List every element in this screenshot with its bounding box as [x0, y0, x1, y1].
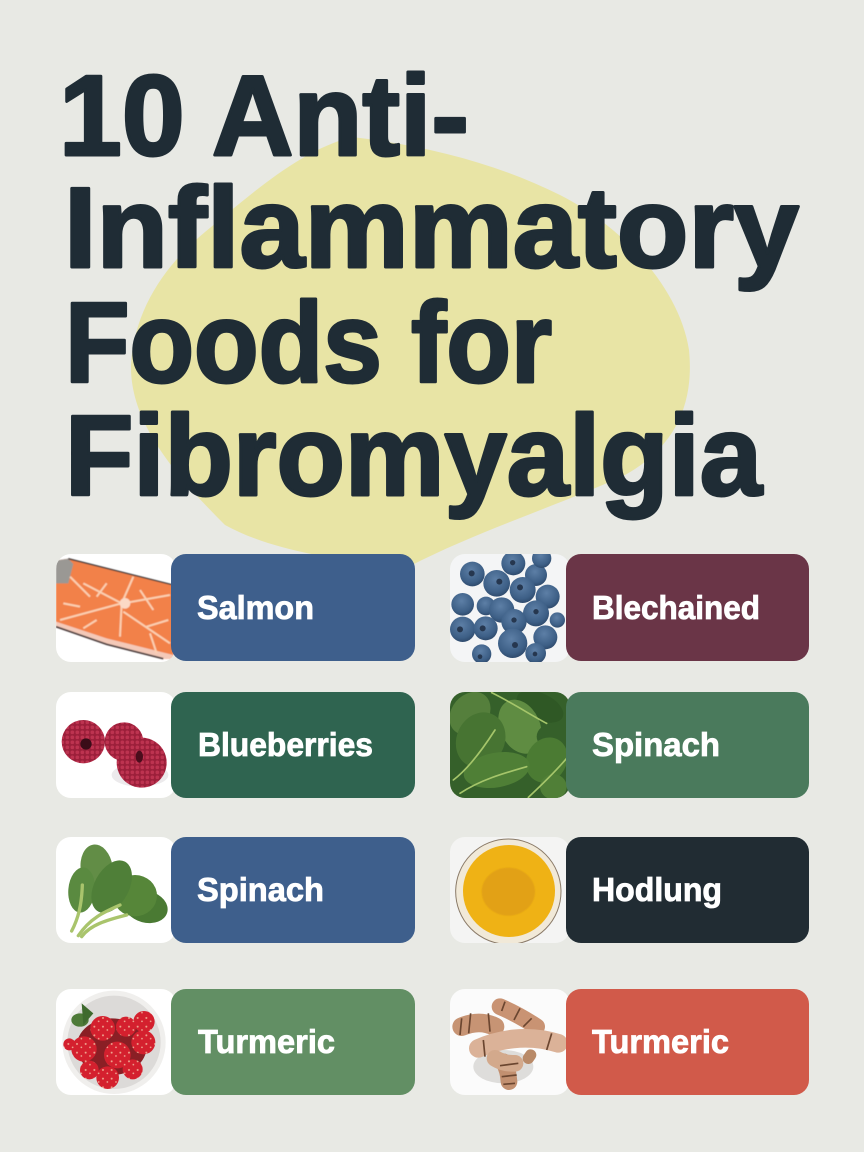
label: Blueberries: Blueberries — [198, 726, 373, 763]
label: Hodlung — [566, 837, 809, 943]
label: Spinach — [171, 837, 415, 943]
photo: spinach bunch — [56, 837, 176, 943]
title: Inflammatory — [64, 165, 799, 292]
photo: spinach leaves — [450, 692, 568, 798]
label: Spinach — [566, 692, 809, 798]
label: Spinach: Spinach — [197, 871, 324, 908]
card: Salmon — [56, 554, 415, 662]
card: Blueberries — [56, 692, 415, 798]
label: Salmon — [171, 554, 415, 661]
label: Turmeric: Turmeric — [198, 1023, 335, 1060]
label: Spinach: Spinach — [592, 726, 720, 763]
title: Foods for — [65, 280, 552, 407]
photo: blueberries — [450, 549, 570, 664]
photo: salmon fillet — [56, 554, 176, 662]
card: Turmeric (right) — [450, 989, 809, 1095]
card: Blechained — [450, 549, 809, 664]
label: Turmeric: Turmeric — [592, 1023, 729, 1060]
title: Fibromyalgia — [65, 393, 764, 520]
title — [59, 53, 799, 520]
decorative yellow blob — [131, 137, 690, 566]
label: Hodlung: Hodlung — [592, 871, 722, 908]
title: 10 Anti- — [59, 53, 469, 180]
photo: turmeric roots — [450, 989, 570, 1095]
label: Turmeric — [566, 989, 809, 1095]
photo: turmeric powder bowl — [450, 837, 570, 944]
label: Salmon: Salmon — [197, 589, 314, 626]
label: Blechained — [566, 554, 809, 661]
label: Blueberries — [171, 692, 415, 798]
label: Blechained: Blechained — [592, 589, 760, 626]
label: Turmeric — [171, 989, 415, 1095]
photo: raspberries — [56, 692, 176, 798]
card: Spinach (left) — [56, 837, 415, 943]
card: Hodlung — [450, 837, 809, 944]
card: Spinach (right) — [450, 692, 809, 798]
card: Turmeric (left) — [56, 989, 415, 1095]
photo: strawberries in a bowl — [56, 989, 176, 1095]
